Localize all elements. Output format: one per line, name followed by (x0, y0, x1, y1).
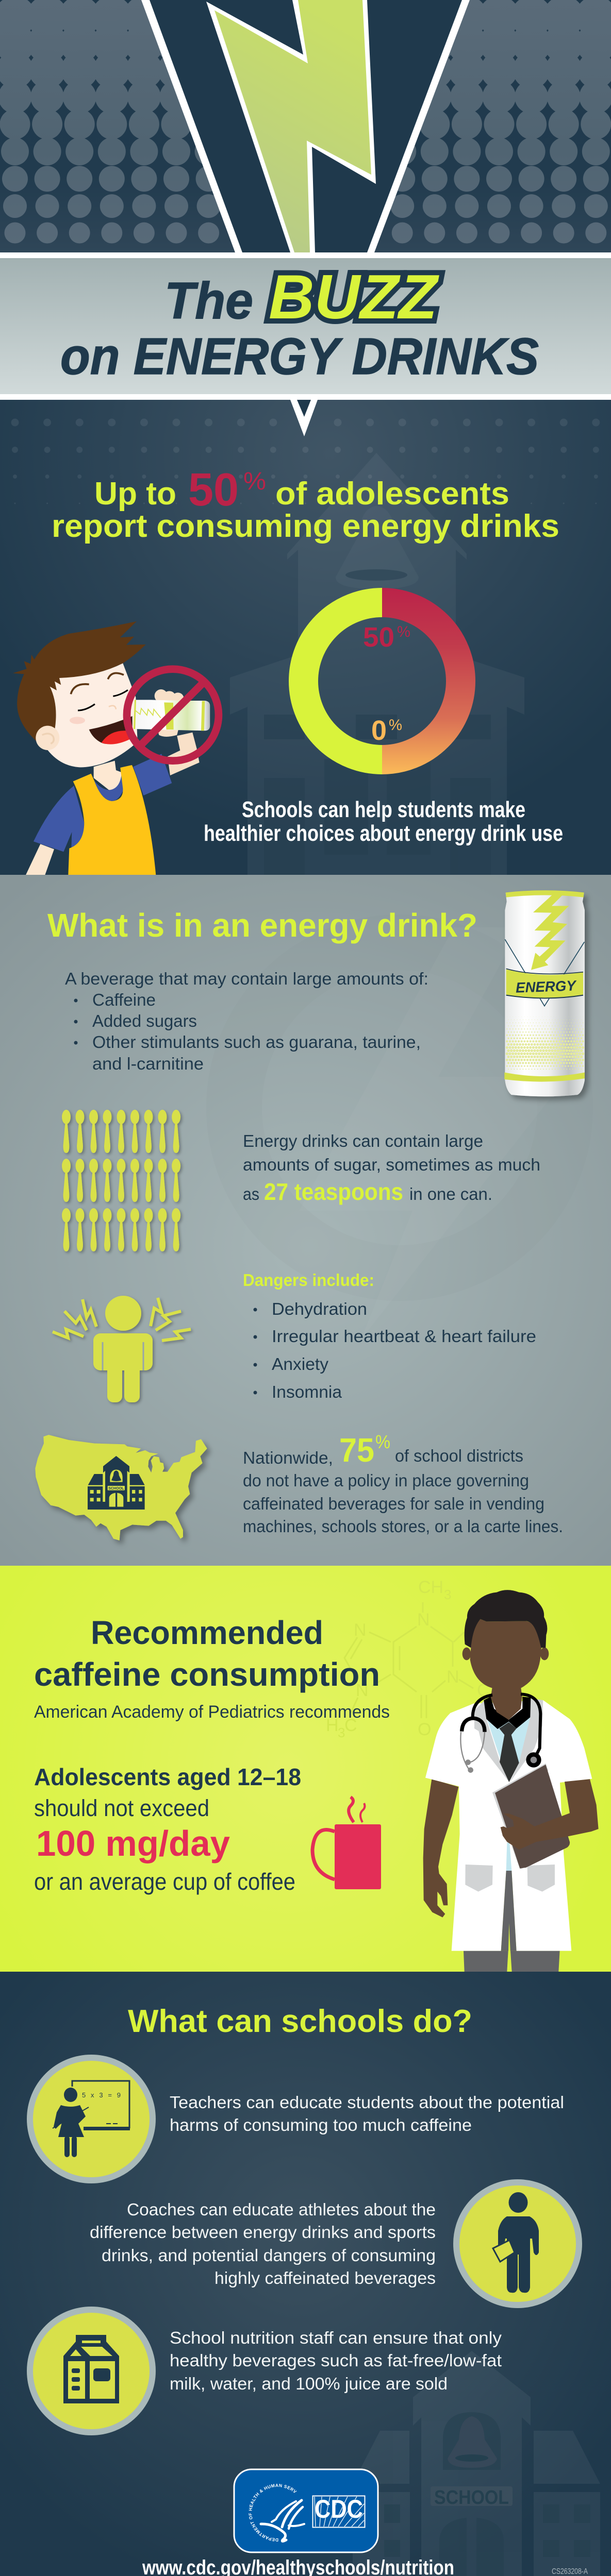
no symbol (127, 669, 219, 761)
text: school district policy: do not have a policy in place governing (243, 1471, 529, 1490)
logo: HHS and CDC (233, 2469, 378, 2553)
doctor lab coat (425, 1700, 592, 1951)
title word: BUZZ: BUZZ (269, 262, 439, 332)
section: recommended caffeine background (0, 1566, 611, 1972)
section: what can schools do background (0, 1972, 611, 2576)
text: adolescents limit: 100 mg/day (36, 1823, 230, 1863)
boy left arm (26, 844, 54, 875)
boy collar (94, 773, 123, 801)
title band (0, 252, 611, 400)
illustration: doctor (423, 1590, 599, 1972)
caffeine molecule watermark: 3 (444, 1587, 451, 1602)
section: adolescents statistic background (0, 400, 611, 875)
text: school district policy: of school districts (395, 1446, 523, 1465)
headline: up to 50%: Up to (94, 476, 176, 512)
text: dangers list: Dehydration (272, 1299, 367, 1318)
boy hand and arm (155, 689, 200, 775)
text: beverage ingredient list: Added sugars (92, 1011, 197, 1030)
donut chart: 50%: 50 (363, 622, 394, 653)
lightning bolt emblem (141, 0, 470, 252)
text: beverage ingredient list: Caffeine (92, 990, 156, 1009)
text: school nutrition staff: School nutrition staff can ensure that only (170, 2328, 502, 2347)
text: school district policy: 75 (339, 1431, 374, 1469)
illustration: boy drinking energy drink (13, 621, 219, 875)
text: sugar amounts: Energy drinks can contain large (243, 1131, 483, 1150)
can label band: ENERGY (516, 977, 577, 996)
caffeine molecule watermark: CH (418, 1578, 443, 1597)
caffeine molecule watermark (326, 1578, 490, 1740)
icon: teacher (30, 2058, 153, 2180)
clipboard (492, 1764, 570, 1869)
heading: what is in an energy drink: What is in an energy drink? (47, 907, 477, 944)
text: sugar amounts: as (243, 1184, 259, 1204)
HHS seal ring text: DEPARTMENT OF HEALTH & HUMAN SERVICES-USA (249, 2484, 297, 2541)
icon: 27 teaspoons (62, 1110, 180, 1251)
text: school district policy: machines, schools stores, or a la carte lines. (243, 1517, 563, 1536)
text: schools can help (204, 797, 563, 846)
headline: up to 50%: % (243, 468, 266, 495)
publication code: CS263208-A (552, 2567, 588, 2576)
text: beverage ingredient list: and l-carnitine (92, 1054, 204, 1073)
icon: US map with school (35, 1435, 207, 1540)
doctor lapels (474, 1699, 543, 1783)
icon: milk carton (30, 2310, 153, 2432)
band pointer (290, 400, 318, 436)
headline: up to 50%: of adolescents (275, 476, 509, 512)
text: coaches: Coaches can educate athletes about the (127, 2200, 436, 2219)
text: adolescents limit: Adolescents aged 12–18 (34, 1764, 301, 1790)
text: coaches: highly caffeinated beverages (214, 2268, 436, 2287)
stethoscope (460, 1694, 541, 1773)
boy neck (94, 761, 123, 791)
text: school district policy: Nationwide, (243, 1448, 333, 1467)
HHS eagle (261, 2500, 304, 2541)
text: teachers: Teachers can educate students about the potential (170, 2093, 564, 2112)
doctor head (463, 1590, 549, 1688)
donut chart: 50% (303, 603, 461, 759)
text: school nutrition staff (170, 2328, 502, 2393)
school watermark bottom (343, 2351, 600, 2576)
HHS seal ring text (249, 2484, 297, 2541)
text: school nutrition staff: milk, water, and 100% juice are sold (170, 2374, 448, 2393)
doctor trouser gap (501, 1871, 517, 1951)
caffeine molecule watermark: H (326, 1716, 339, 1735)
doctor neck and collar (484, 1686, 531, 1729)
text: American Academy of Pediatrics: American Academy of Pediatrics recommends (34, 1702, 390, 1722)
text: adolescents limit (34, 1764, 301, 1895)
text: coaches: drinks, and potential dangers of consuming (102, 2246, 436, 2265)
doctor pockets (465, 1865, 555, 1892)
caffeine molecule watermark: N (417, 1610, 430, 1630)
small school icon: SCHOOL (108, 1486, 124, 1490)
text: dangers list: Anxiety (272, 1354, 329, 1374)
boy shirt (34, 754, 172, 852)
caffeine molecule watermark: C (477, 1681, 490, 1700)
fading dot rows (15, 422, 611, 503)
text: schools can help: Schools can help students make (242, 797, 525, 822)
headline: up to 50% (52, 464, 559, 544)
doctor left arm (423, 1779, 458, 1918)
boy face (47, 663, 138, 767)
caffeine molecule watermark: N (447, 1667, 459, 1687)
can label band (506, 969, 583, 998)
doctor trousers (464, 1951, 560, 1972)
title line: The: The (164, 272, 253, 330)
CDC box: CDC (315, 2495, 363, 2523)
boy face details (70, 673, 133, 744)
can base band (504, 1073, 585, 1082)
title line: on ENERGY DRINKS: on ENERGY DRINKS (60, 328, 539, 385)
text: dangers list (243, 1270, 536, 1401)
doctor shirt (486, 1717, 530, 1871)
text: adolescents limit: should not exceed (34, 1795, 209, 1821)
text: school district policy (243, 1431, 563, 1536)
text: coaches (90, 2200, 436, 2287)
heading: recommended caffeine consumption: Recommended (91, 1614, 323, 1651)
headline: up to 50%: 50 (188, 464, 239, 516)
caffeine molecule watermark: 3 (338, 1725, 345, 1740)
text: teachers (170, 2093, 564, 2134)
text: coaches: difference between energy drinks and sports (90, 2223, 436, 2242)
text: sugar amounts: in one can. (409, 1184, 492, 1204)
donut chart: 50%: 0 (371, 715, 387, 746)
text: dangers list: Dangers include: (243, 1270, 374, 1290)
text: teachers: harms of consuming too much caffeine (170, 2115, 472, 2134)
heading: recommended caffeine consumption: caffeine consumption (34, 1656, 380, 1693)
text: school nutrition staff: healthy beverages such as fat-free/low-fat (170, 2351, 502, 2370)
text: school district policy: caffeinated beverages for sale in vending (243, 1494, 544, 1513)
school watermark bottom: SCHOOL (434, 2487, 509, 2509)
headline: up to 50%: report consuming energy drinks (52, 509, 559, 544)
small school icon (88, 1456, 145, 1510)
header background (0, 0, 611, 252)
can halftone (507, 1016, 584, 1069)
icon: coffee mug (312, 1797, 381, 1889)
school watermark (230, 453, 524, 875)
text: dangers list: Insomnia (272, 1382, 342, 1401)
icon: coach (456, 2182, 579, 2305)
icon: person with jitters (53, 1296, 191, 1402)
text: dangers list: Irregular heartbeat & heart failure (272, 1327, 536, 1346)
text: sugar amounts: amounts of sugar, sometimes as much (243, 1155, 540, 1174)
boy hair (13, 621, 146, 741)
can lightning bolt (531, 893, 569, 970)
heading: recommended caffeine consumption (34, 1614, 380, 1693)
icon: teacher: 5 x 3 = 9 (82, 2091, 121, 2099)
text: beverage ingredient list: A beverage that may contain large amounts of: (65, 969, 428, 988)
small energy can (134, 700, 210, 731)
caffeine molecule watermark: N (356, 1681, 369, 1700)
illustration: energy drink can (504, 890, 585, 1096)
caffeine molecule watermark: N (354, 1620, 367, 1640)
caffeine molecule watermark: C (344, 1716, 357, 1735)
text: adolescents limit: or an average cup of coffee (34, 1868, 295, 1895)
boy ear (36, 726, 59, 750)
donut chart: 50%: % (389, 717, 402, 734)
doctor tie (499, 1722, 519, 1782)
caffeine molecule watermark: O (418, 1720, 431, 1739)
section: what is in an energy drink background (0, 875, 611, 1566)
can chevron lines (505, 939, 584, 1006)
text: sugar amounts (243, 1131, 540, 1205)
text: sugar amounts: 27 teaspoons (264, 1178, 403, 1205)
doctor right arm (501, 1779, 599, 1850)
heading: what can schools do: What can schools do? (128, 2004, 472, 2039)
donut chart: 50%: % (397, 623, 410, 640)
text: beverage ingredient list (65, 969, 428, 1073)
text: beverage ingredient list: Other stimulants such as guarana, taurine, (92, 1032, 421, 1052)
text: school district policy: % (375, 1431, 390, 1452)
boy vest (68, 765, 156, 875)
